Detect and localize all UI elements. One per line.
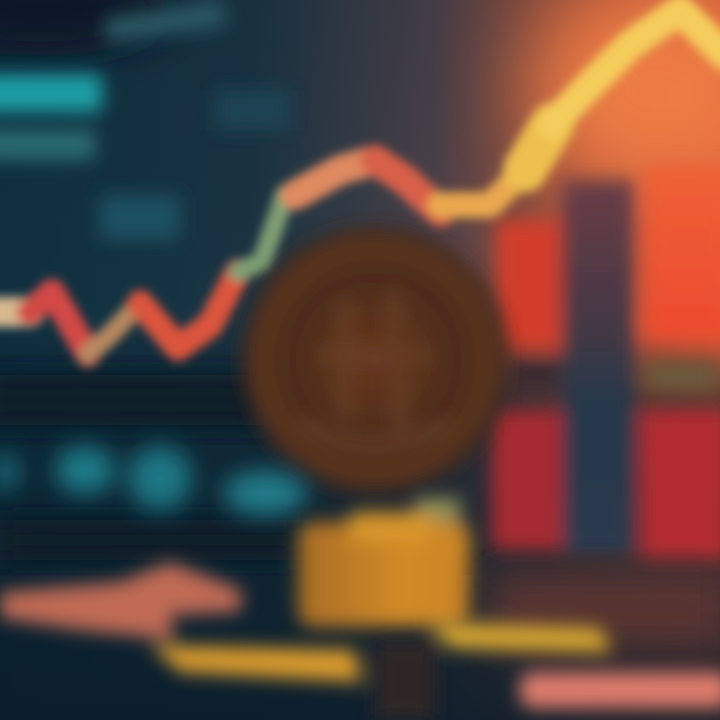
panel: salmon and gold bands at the bottom — [0, 562, 720, 720]
panel: teal screen blocks top left — [0, 2, 290, 240]
coin face detail — [300, 290, 450, 445]
bar chart: red and dark columns on the right — [492, 165, 720, 560]
line chart: rising price line — [0, 10, 720, 354]
panel: teal screen blocks lower left — [0, 446, 307, 515]
icon: gold coin stack — [298, 498, 470, 627]
panel: table surface bottom right — [490, 575, 720, 645]
icon: coin — [241, 226, 509, 494]
